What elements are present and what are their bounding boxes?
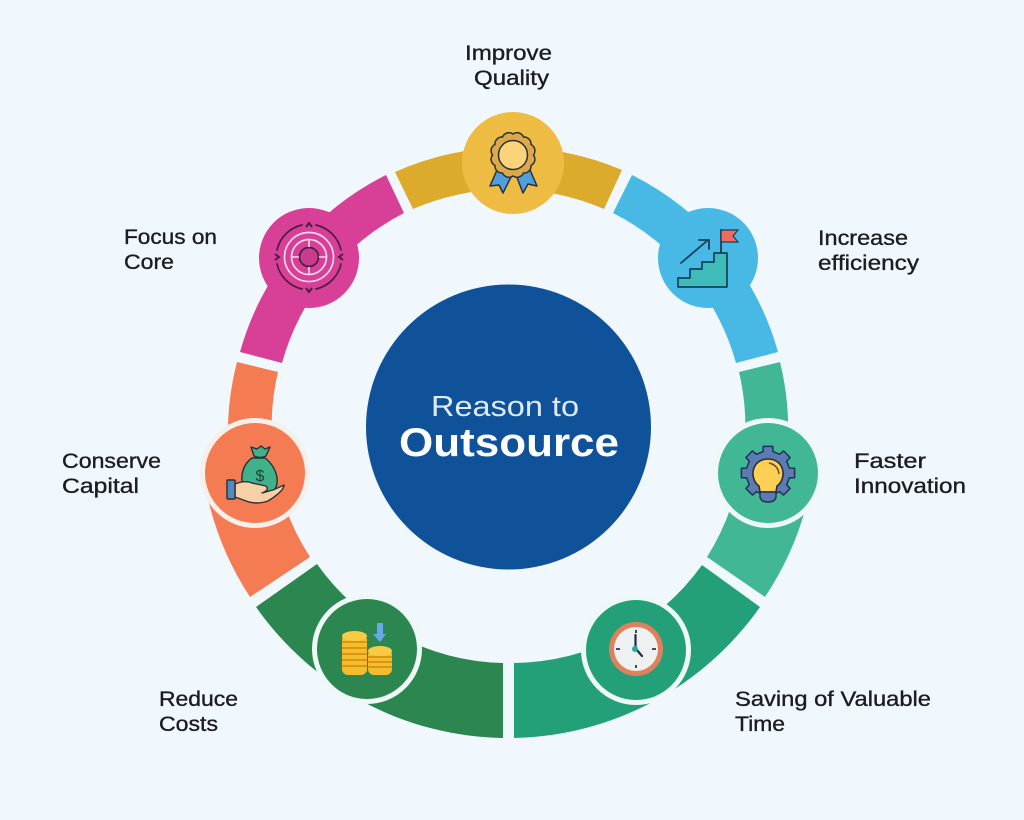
icon: hand holding money bag: $ — [256, 468, 265, 485]
label: Focus on Core — [124, 226, 217, 274]
label: Increase efficiency — [818, 227, 920, 275]
icon: stairs with flag — [678, 229, 738, 287]
label: Conserve Capital: Conserve — [62, 450, 161, 473]
icon: hand holding money bag — [227, 446, 284, 503]
label: Faster Innovation — [854, 450, 966, 498]
center circle: Reason to Outsource: Reason to — [431, 391, 579, 423]
label: Saving of Valuable Time: Saving of Valuable — [735, 688, 931, 711]
label: Faster Innovation: Innovation — [854, 475, 966, 498]
label: Conserve Capital: Capital — [62, 475, 139, 498]
label: Faster Innovation: Faster — [854, 450, 926, 473]
segment: Improve Quality — [395, 112, 622, 214]
segment: Increase efficiency — [613, 175, 778, 363]
label: Improve Quality: Improve — [465, 42, 552, 65]
label: Focus on Core: Focus on — [124, 226, 217, 249]
label: Reduce Costs — [159, 688, 238, 736]
segment: Reduce Costs — [256, 564, 503, 738]
label: Improve Quality: Quality — [474, 67, 550, 90]
icon: gear with light bulb — [741, 446, 795, 502]
icon: target — [275, 223, 343, 292]
center circle: Reason to Outsource — [366, 284, 651, 570]
label: Saving of Valuable Time: Time — [735, 713, 785, 736]
label: Conserve Capital — [62, 450, 161, 498]
label: Reduce Costs: Reduce — [159, 688, 238, 711]
segment: Conserve Capital — [200, 362, 310, 597]
icon: coin stacks with down arrow — [342, 623, 392, 675]
label: Increase efficiency: efficiency — [818, 252, 920, 275]
icon: clock — [609, 622, 663, 676]
icon: medal — [490, 133, 537, 193]
label: Saving of Valuable Time — [735, 688, 931, 736]
center circle: Reason to Outsource: Outsource — [399, 421, 619, 465]
label: Improve Quality — [465, 42, 552, 90]
label: Increase efficiency: Increase — [818, 227, 908, 250]
segment: Faster Innovation — [707, 362, 823, 597]
segment: Focus on Core — [240, 175, 404, 363]
segment: Saving of Valuable Time — [514, 565, 760, 738]
label: Reduce Costs: Costs — [159, 713, 218, 736]
label: Focus on Core: Core — [124, 251, 174, 274]
